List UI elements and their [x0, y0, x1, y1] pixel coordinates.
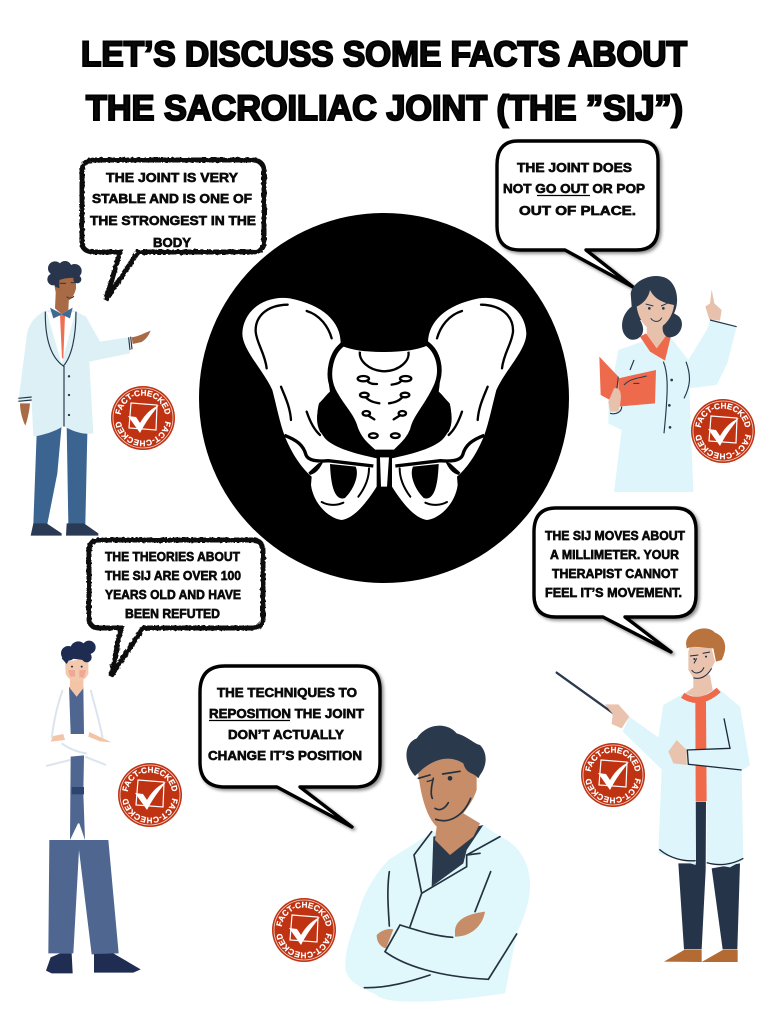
- speech bubble 1: joint is stable: THE STRONGEST IN THE: [90, 213, 256, 228]
- speech bubble 1: joint is stable: STABLE AND IS ONE OF: [92, 191, 252, 206]
- fact-checked badge 5: FACT-CHECKED: [586, 778, 641, 804]
- fact-checked badge 4: FACT-CHECKED: [276, 933, 332, 958]
- fact-checked badge 2: FACT-CHECKED: [696, 434, 751, 460]
- speech bubble 4: techniques: REPOSITION THE JOINT: [209, 706, 364, 721]
- title: [81, 34, 687, 128]
- speech bubble 2: joint does not go out: NOT GO OUT OR POP: [503, 181, 645, 196]
- character 2: doctor with book: [599, 276, 737, 492]
- speech bubble 2: joint does not go out: THE JOINT DOES: [517, 160, 632, 175]
- character 3: doctor with crossed arms: [46, 641, 141, 973]
- fact-checked badge 4: FACT-CHECKED: [276, 902, 332, 926]
- fact-checked badge 3: [118, 763, 182, 827]
- character 5: doctor with pointer: [557, 628, 750, 962]
- fact-checked badge 1: FACT-CHECKED: [115, 390, 170, 414]
- speech bubble 3: theories: BEEN REFUTED: [125, 606, 220, 621]
- right hip bone: [391, 298, 526, 520]
- black pelvic cavity: [317, 383, 452, 457]
- speech bubble 5: SIJ moves a millimeter: FEEL IT’S MOVEMENT.: [545, 585, 682, 600]
- fact-checked badge 2: FACT-CHECKED: [695, 402, 750, 428]
- fact-checked badge 5: [581, 743, 645, 807]
- central black circle: [199, 213, 569, 583]
- fact-checked badge 2: [691, 399, 755, 463]
- character 1: doctor with bow tie: [18, 261, 151, 536]
- sacrum: [330, 343, 439, 452]
- fact-checked badge 4: [272, 898, 336, 962]
- speech bubble 4: techniques: CHANGE IT’S POSITION: [208, 748, 362, 763]
- character 4: doctor portrait, arms crossed: [345, 726, 530, 1002]
- speech bubble 4: techniques: [200, 666, 380, 827]
- speech bubble 3: theories: THE THEORIES ABOUT: [105, 549, 240, 564]
- speech bubble 1: joint is stable: [82, 160, 264, 300]
- speech bubble 5: SIJ moves a millimeter: THERAPIST CANNOT: [552, 566, 678, 581]
- speech bubble 2: joint does not go out: [497, 141, 658, 287]
- speech bubble 4: techniques: THE TECHNIQUES TO: [217, 685, 357, 700]
- speech bubble 1: joint is stable: BODY: [153, 235, 191, 250]
- speech bubble 2: joint does not go out: OUT OF PLACE.: [519, 203, 636, 218]
- speech bubble 3: theories: [89, 540, 263, 676]
- fact-checked badge 5: FACT-CHECKED: [585, 746, 640, 772]
- left hip bone: [242, 298, 378, 520]
- speech bubble 4: techniques: DON’T ACTUALLY: [228, 727, 344, 742]
- speech bubble 5: SIJ moves a millimeter: THE SIJ MOVES ABOUT: [545, 528, 685, 543]
- icon: pelvis bones: [242, 298, 526, 520]
- fact-checked badge 1: FACT-CHECKED: [116, 421, 171, 446]
- speech bubble 5: SIJ moves a millimeter: A MILLIMETER. YOUR: [550, 547, 680, 562]
- speech bubble 5: SIJ moves a millimeter: [534, 508, 696, 652]
- pubic symphysis: [377, 455, 392, 488]
- title: LET’S DISCUSS SOME FACTS ABOUT: [81, 34, 687, 74]
- speech bubble 1: joint is stable: THE JOINT IS VERY: [106, 170, 238, 185]
- fact-checked badge 3: FACT-CHECKED: [122, 766, 178, 792]
- speech bubble 3: theories: YEARS OLD AND HAVE: [105, 587, 241, 602]
- fact-checked badge 3: FACT-CHECKED: [122, 798, 178, 824]
- title: THE SACROILIAC JOINT (THE ”SIJ”): [86, 88, 683, 128]
- speech bubble 3: theories: THE SIJ ARE OVER 100: [105, 568, 241, 583]
- fact-checked badge 1: [111, 386, 175, 450]
